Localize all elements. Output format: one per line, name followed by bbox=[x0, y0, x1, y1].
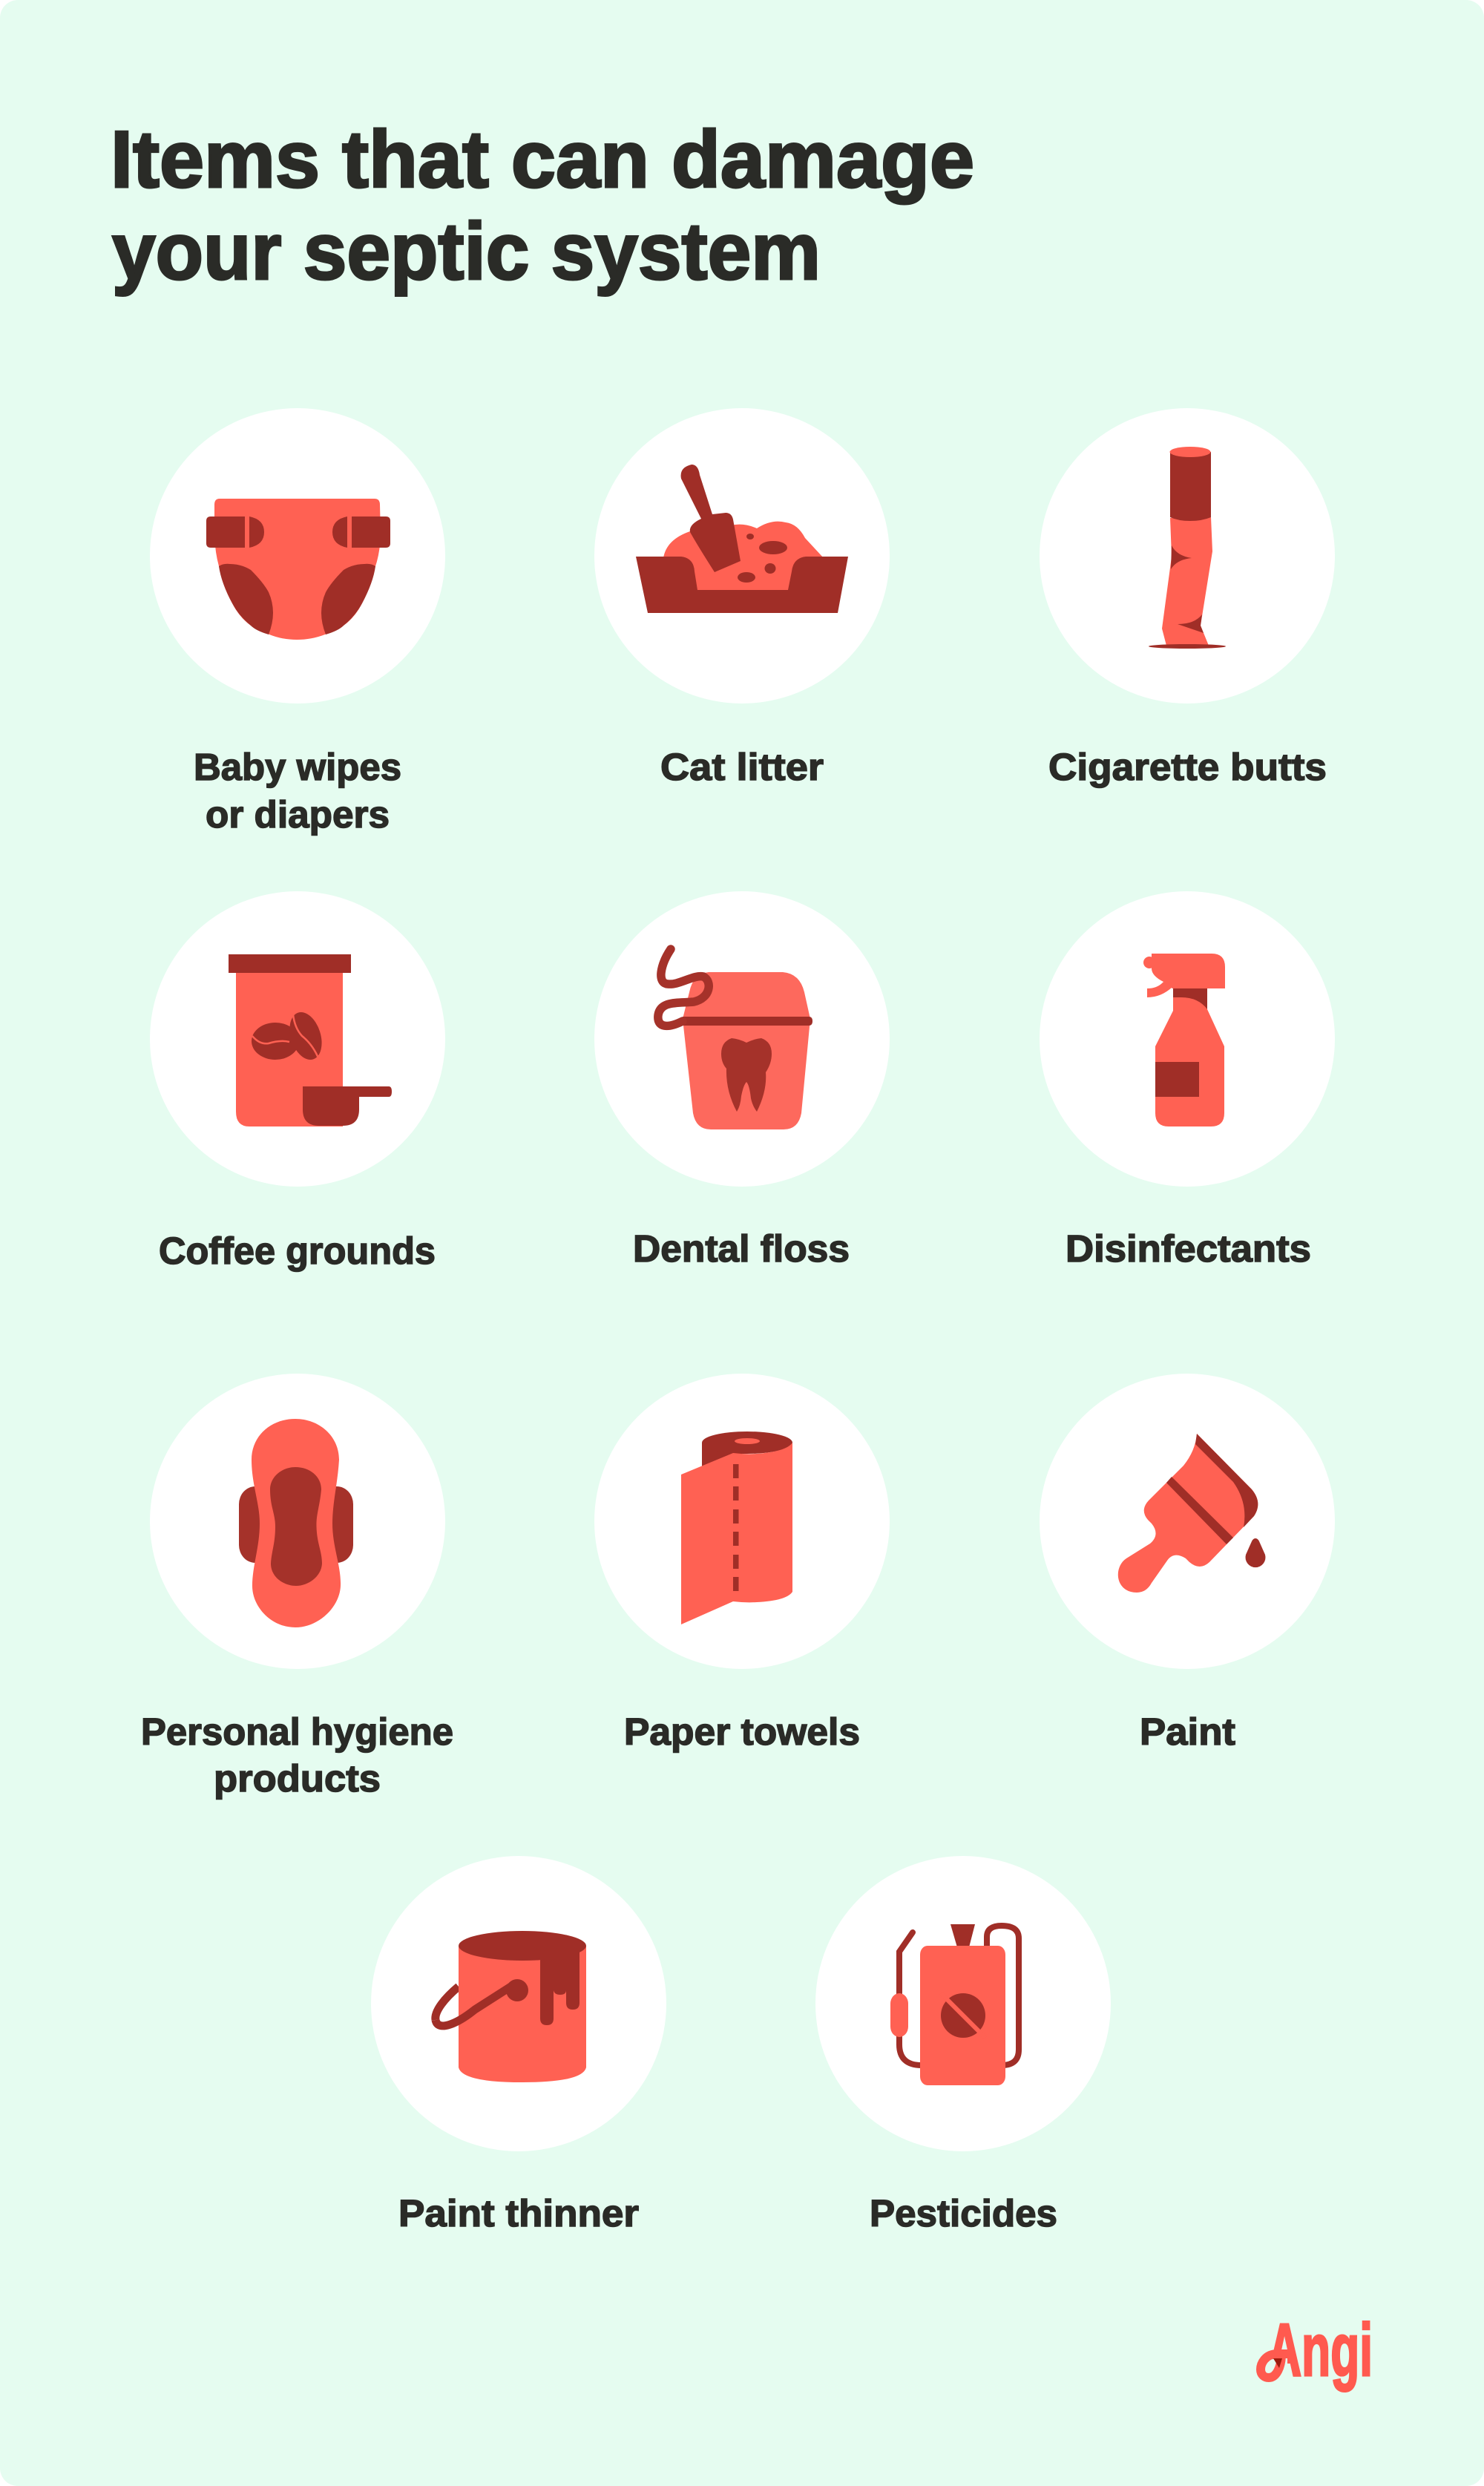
label: Cat litter bbox=[660, 746, 824, 788]
label: Paper towels bbox=[624, 1711, 860, 1753]
icon: litter box and scoop bbox=[636, 465, 848, 613]
panel: cigarette butts bbox=[1040, 408, 1335, 788]
panel: personal hygiene products bbox=[141, 1374, 453, 1800]
icon: paper towel roll bbox=[681, 1431, 792, 1624]
label: Coffee grounds bbox=[159, 1230, 436, 1272]
title bbox=[111, 114, 974, 297]
panel: paper towels bbox=[594, 1374, 890, 1753]
panel: paint bbox=[1040, 1374, 1335, 1753]
label: Dental floss bbox=[633, 1227, 850, 1270]
icon: diaper bbox=[206, 499, 390, 640]
icon: paint drop bbox=[1245, 1538, 1266, 1567]
title: your septic system bbox=[112, 206, 821, 297]
icon: sanitary pad bbox=[239, 1419, 353, 1627]
title: Items that can damage bbox=[111, 114, 974, 205]
label: products bbox=[214, 1757, 381, 1800]
label bbox=[194, 746, 401, 836]
label: Paint thinner bbox=[398, 2192, 639, 2234]
panel: baby wipes or diapers bbox=[150, 408, 445, 836]
icon: coffee canister and scoop bbox=[229, 954, 392, 1126]
icon: pesticide sprayer bbox=[890, 1924, 1019, 2085]
logo: Angi bbox=[1256, 2321, 1370, 2392]
label: Paint bbox=[1140, 1711, 1235, 1753]
icon: paint brush bbox=[1118, 1434, 1266, 1593]
icon: spray bottle bbox=[1143, 954, 1225, 1126]
panel: coffee grounds bbox=[150, 891, 445, 1272]
label: or diapers bbox=[206, 793, 390, 836]
panel: pesticides bbox=[815, 1856, 1111, 2234]
panel: cat litter bbox=[594, 408, 890, 788]
panel: paint thinner bbox=[371, 1856, 666, 2234]
label: Baby wipes bbox=[194, 746, 401, 788]
icon: paint can bbox=[436, 1931, 586, 2082]
panel: disinfectants bbox=[1040, 891, 1335, 1270]
logo: Angi: Angi bbox=[1267, 2309, 1373, 2392]
label bbox=[141, 1711, 453, 1800]
label: Cigarette butts bbox=[1048, 746, 1327, 788]
label: Disinfectants bbox=[1066, 1227, 1311, 1270]
label: Personal hygiene bbox=[141, 1711, 453, 1753]
label: Pesticides bbox=[870, 2192, 1057, 2234]
panel: dental floss bbox=[594, 891, 890, 1270]
icon: dental floss container bbox=[658, 949, 812, 1129]
icon: cigarette butt bbox=[1149, 447, 1226, 649]
